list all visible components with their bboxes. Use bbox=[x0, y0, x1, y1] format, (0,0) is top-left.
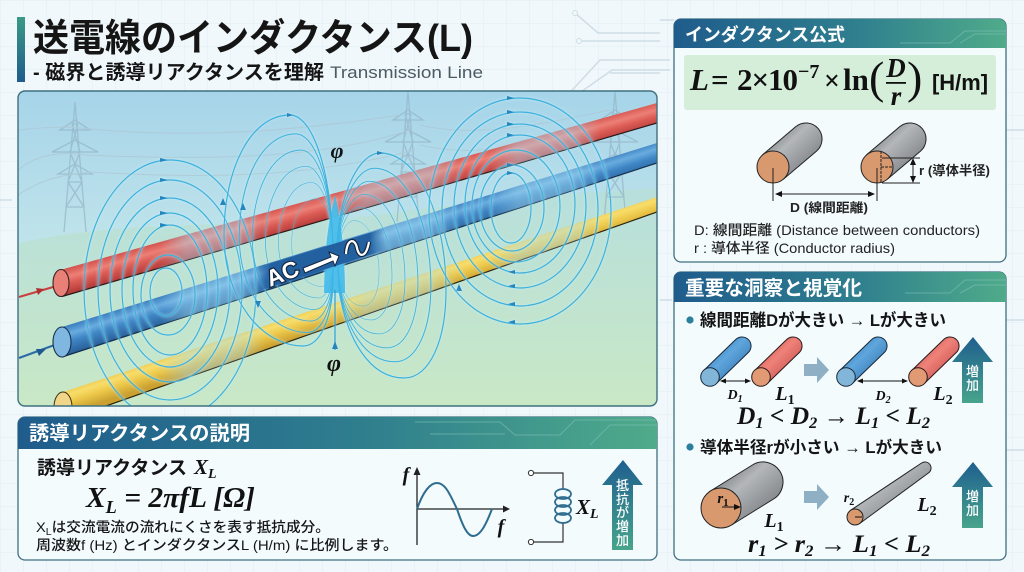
chart: sine wave: f bbox=[403, 464, 412, 486]
conductor thin bbox=[844, 462, 931, 525]
dimension D1: 1 bbox=[738, 394, 743, 405]
conductor thin: 2 bbox=[849, 497, 854, 508]
panel: inductance formula bbox=[674, 19, 1006, 262]
conductor thin: r bbox=[844, 491, 849, 506]
conductors D1 bbox=[701, 337, 802, 386]
formula: distance: 2 bbox=[808, 415, 817, 432]
formula box: r bbox=[891, 81, 902, 111]
magnetic field: left rings bbox=[84, 158, 256, 420]
formula box: ( bbox=[869, 52, 884, 103]
panel: insights bbox=[674, 272, 1006, 560]
dimension D: D (線間距離) bbox=[790, 200, 868, 215]
label L2: 2 bbox=[930, 504, 937, 519]
formula: distance: D bbox=[737, 403, 755, 430]
formula box: ln bbox=[843, 62, 869, 97]
label L1: 1 bbox=[788, 393, 795, 408]
conductors D2 bbox=[837, 337, 959, 386]
wire: blue bbox=[19, 143, 657, 358]
formula: XL: = 2πfL [Ω] bbox=[117, 482, 255, 514]
explanation text: 周波数f (Hz) とインダクタンスL (H/m) に比例します。 bbox=[36, 537, 398, 553]
arrow: resistance increases: が bbox=[616, 505, 629, 520]
arrow: increase: 加 bbox=[966, 503, 979, 518]
arrow: increase: 加 bbox=[966, 378, 979, 393]
legend text bbox=[694, 222, 980, 256]
conductor thick bbox=[701, 462, 783, 528]
insight 2 heading: 導体半径rが小さい → Lが大きい bbox=[700, 437, 942, 457]
subtitle: - 磁界と誘導リアクタンスを理解 bbox=[33, 60, 324, 84]
magnetic field: right rings bbox=[429, 96, 611, 324]
circuit decoration: top middle bbox=[0, 10, 1024, 450]
formula: XL: L bbox=[105, 497, 117, 517]
formula: distance: < L bbox=[879, 403, 922, 430]
formula box: [H/m] bbox=[932, 70, 988, 95]
dimension D bbox=[773, 168, 877, 215]
arrow: resistance increases bbox=[602, 460, 643, 550]
dimension D2: D bbox=[875, 389, 886, 404]
wire: red bbox=[19, 103, 657, 297]
magnetic field: centre lobes bbox=[220, 113, 462, 378]
arrow: resistance increases: 抗 bbox=[616, 492, 629, 507]
formula box: D bbox=[885, 53, 906, 83]
formula box: × bbox=[824, 66, 840, 97]
chart: sine wave bbox=[403, 464, 510, 545]
formula: distance: < D bbox=[764, 403, 809, 430]
diagram: radius comparison bbox=[701, 462, 993, 535]
arrow: increase: 増 bbox=[966, 364, 979, 379]
label L2: L bbox=[933, 383, 946, 405]
formula: radius: 2 bbox=[804, 543, 813, 560]
label L1: L bbox=[775, 383, 788, 405]
panel header bbox=[18, 417, 657, 449]
dimension r bbox=[882, 158, 990, 183]
formula: distance: 1 bbox=[755, 415, 764, 432]
label L1: 1 bbox=[777, 520, 784, 535]
legend text: D: 線間距離 (Distance between conductors) bbox=[694, 222, 980, 238]
icon: inductor coil: X bbox=[576, 495, 590, 519]
formula: radius: < L bbox=[877, 531, 922, 558]
conductor left bbox=[757, 123, 822, 183]
title accent bar bbox=[17, 17, 25, 82]
central flux bundle bbox=[324, 195, 345, 293]
icon: transmission towers bbox=[18, 92, 638, 232]
formula: distance: → L bbox=[817, 403, 871, 430]
arrow: increase: 増 bbox=[966, 489, 979, 504]
formula box: L bbox=[689, 62, 709, 97]
formula: radius: 2 bbox=[921, 543, 930, 560]
panel header bbox=[674, 272, 1006, 302]
label L2: L bbox=[917, 494, 930, 516]
label: flux bottom: φ bbox=[327, 351, 341, 377]
legend text: r : 導体半径 (Conductor radius) bbox=[694, 240, 895, 256]
dimension D2: 2 bbox=[885, 395, 891, 406]
arrow: increase bbox=[952, 337, 993, 403]
chart: sine wave: f bbox=[498, 516, 507, 538]
conductor thick: r bbox=[717, 491, 723, 507]
diagram: two conductors bbox=[757, 123, 990, 215]
symbol: XL: L bbox=[207, 467, 217, 482]
arrow: resistance increases: 加 bbox=[616, 533, 629, 548]
panel header: インダクタンス公式 bbox=[685, 24, 845, 45]
formula: radius: r bbox=[748, 531, 758, 558]
wire: yellow bbox=[54, 197, 657, 422]
label: flux top: φ bbox=[331, 138, 344, 163]
arrow: to wider spacing bbox=[804, 357, 829, 383]
subtitle english: Transmission Line bbox=[330, 63, 483, 82]
arrow: resistance increases: 増 bbox=[616, 519, 629, 534]
formula box: −7 bbox=[798, 61, 819, 83]
panel: magnetic field illustration bbox=[18, 91, 657, 422]
dimension D2 bbox=[857, 378, 908, 406]
arrow: increase bbox=[952, 462, 993, 528]
panel header: 重要な洞察と視覚化 bbox=[685, 277, 862, 300]
title block bbox=[17, 17, 483, 84]
label: AC with arrow and wave: AC bbox=[262, 255, 303, 292]
formula: distance: 2 bbox=[921, 415, 930, 432]
label: AC with arrow and wave bbox=[255, 228, 385, 292]
dimension r: r (導体半径) bbox=[919, 163, 990, 178]
label L2: 2 bbox=[946, 393, 953, 408]
conductor thick: 1 bbox=[723, 497, 729, 509]
explanation text: は交流電流の流れにくさを表す抵抗成分。 bbox=[52, 519, 330, 535]
field haze over wires bbox=[162, 120, 597, 386]
dimension D1: D bbox=[727, 388, 738, 403]
formula: distance: 1 bbox=[871, 415, 879, 432]
icon: inductor coil: L bbox=[589, 507, 599, 522]
explanation text bbox=[36, 519, 398, 553]
formula box: ) bbox=[907, 52, 922, 103]
arrow: resistance increases: 抵 bbox=[616, 478, 629, 493]
icon: inductor coil bbox=[528, 470, 599, 545]
label L1: L bbox=[764, 510, 777, 532]
formula: radius: > r bbox=[767, 531, 805, 558]
panel: inductive reactance bbox=[18, 417, 657, 560]
formula: XL: X bbox=[86, 482, 105, 514]
explanation text: X bbox=[36, 519, 45, 535]
conductor right bbox=[861, 123, 926, 183]
formula box bbox=[684, 52, 996, 111]
formula: radius: → L bbox=[813, 531, 869, 558]
panel header bbox=[674, 19, 1006, 48]
hill background bbox=[18, 188, 657, 406]
diagram: distance comparison bbox=[701, 337, 993, 408]
formula: radius: 1 bbox=[758, 543, 767, 560]
formula box: = bbox=[711, 62, 729, 97]
formula: radius: 1 bbox=[869, 543, 877, 560]
formula box: 2×10 bbox=[737, 62, 798, 97]
heading: reactance: 誘導リアクタンス bbox=[37, 457, 187, 479]
insight 1 heading: 線間距離Dが大きい → Lが大きい bbox=[700, 310, 946, 330]
explanation text: L bbox=[46, 527, 52, 538]
title: 送電線のインダクタンス(L) bbox=[33, 18, 473, 60]
arrow: to thinner conductor bbox=[804, 484, 829, 510]
symbol: XL: X bbox=[194, 455, 208, 479]
dimension D1 bbox=[720, 378, 751, 405]
panel header: 誘導リアクタンスの説明 bbox=[29, 421, 250, 445]
